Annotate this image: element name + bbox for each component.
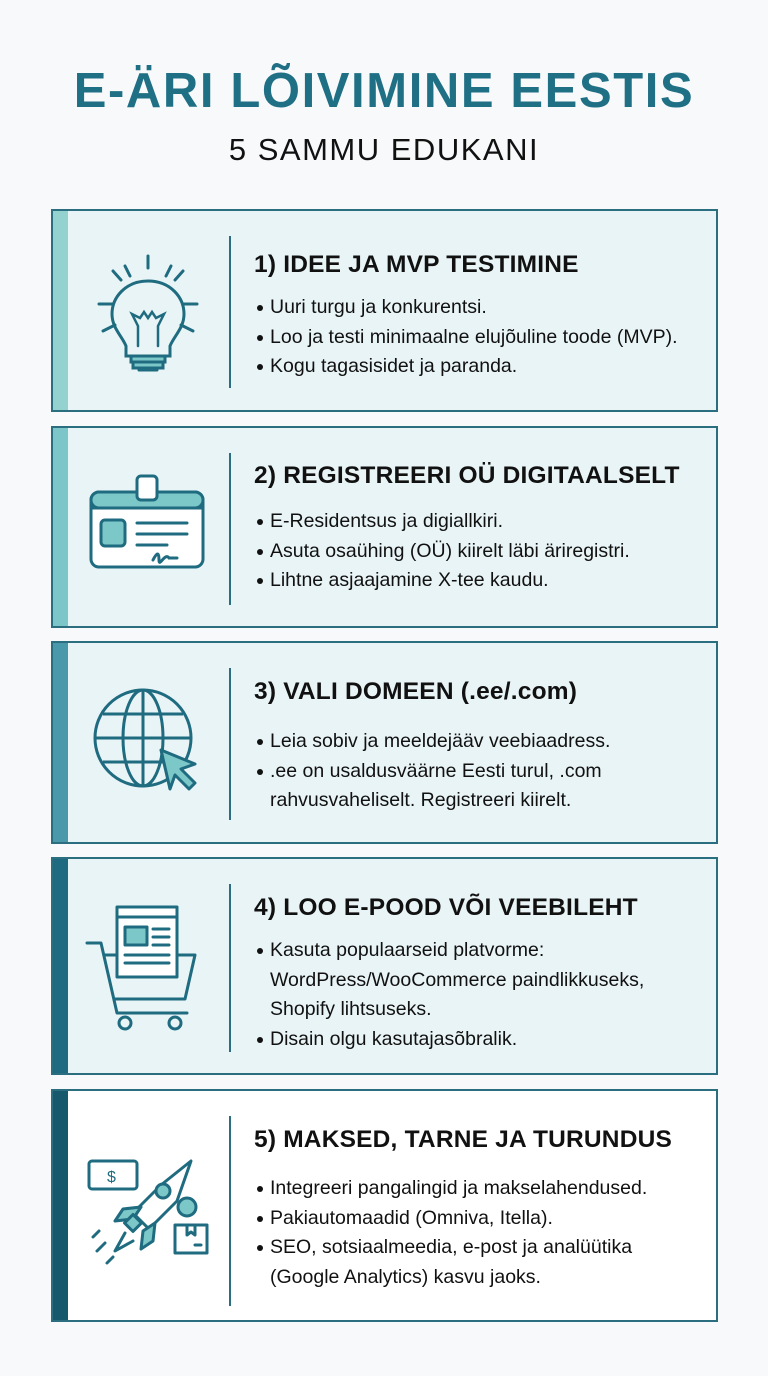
panel: step 1 <box>51 209 718 412</box>
bullets: Kogu tagasisidet ja paranda. <box>270 355 517 377</box>
bullets: (Google Analytics) kasvu jaoks. <box>270 1266 541 1288</box>
icon: rocket with money and package <box>88 1159 208 1265</box>
bullets: Asuta osaühing (OÜ) kiirelt läbi äriregistri. <box>270 540 630 562</box>
bullets <box>257 730 610 811</box>
bullets: rahvusvaheliselt. Registreeri kiirelt. <box>270 789 571 811</box>
bullets: Lihtne asjaajamine X-tee kaudu. <box>270 569 549 591</box>
heading: 2) REGISTREERI OÜ DIGITAALSELT <box>254 462 680 489</box>
heading: 4) LOO E-POOD VÕI VEEBILEHT <box>254 894 638 921</box>
panel: step 4 <box>51 857 718 1075</box>
bullets: Uuri turgu ja konkurentsi. <box>270 296 487 318</box>
bullets <box>257 1177 647 1288</box>
heading: 3) VALI DOMEEN (.ee/.com) <box>254 678 577 705</box>
bullets: .ee on usaldusväärne Eesti turul, .com <box>270 760 602 782</box>
heading: 5) MAKSED, TARNE JA TURUNDUS <box>254 1126 672 1153</box>
title: E-ÄRI LÕIVIMINE EESTIS <box>74 64 694 118</box>
bullets: Loo ja testi minimaalne elujõuline toode (MVP). <box>270 326 678 348</box>
icon: light bulb <box>98 254 198 372</box>
panel: step 3 <box>51 641 718 844</box>
panel: step 5 <box>51 1089 718 1322</box>
bullets <box>257 939 644 1050</box>
icon: rocket with money and package: $ <box>107 1169 116 1186</box>
panel: step 2 <box>51 426 718 628</box>
bullets: Integreeri pangalingid ja makselahendused. <box>270 1177 647 1199</box>
icon: globe with cursor <box>94 688 197 791</box>
bullets <box>257 296 678 377</box>
bullets: Kasuta populaarseid platvorme: <box>270 939 544 961</box>
bullets: Disain olgu kasutajasõbralik. <box>270 1028 517 1050</box>
bullets <box>257 510 630 591</box>
bullets: Pakiautomaadid (Omniva, Itella). <box>270 1206 553 1228</box>
bullets: WordPress/WooCommerce paindlikkuseks, <box>270 968 644 990</box>
heading: 1) IDEE JA MVP TESTIMINE <box>254 251 579 278</box>
subtitle: 5 SAMMU EDUKANI <box>229 132 539 167</box>
bullets: SEO, sotsiaalmeedia, e-post ja analüütika <box>270 1236 632 1258</box>
icon: ID card <box>90 474 204 568</box>
bullets: E-Residentsus ja digiallkiri. <box>270 510 503 532</box>
icon: shopping cart <box>86 906 196 1030</box>
bullets: Leia sobiv ja meeldejääv veebiaadress. <box>270 730 610 752</box>
bullets: Shopify lihtsuseks. <box>270 998 432 1020</box>
